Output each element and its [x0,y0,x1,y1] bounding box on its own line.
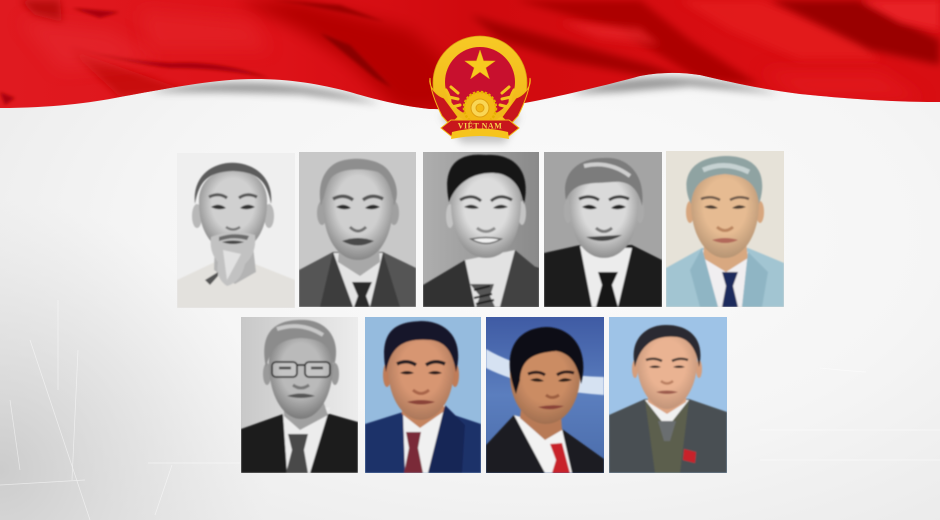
head [564,158,644,258]
head [192,163,274,286]
head [263,320,339,419]
emblem ribbons [430,78,530,125]
head [383,321,459,420]
emblem cog wheel [464,92,496,124]
flag folds [0,0,940,110]
suit [609,399,727,473]
suit [666,248,784,307]
emblem base scroll: VIỆT NAM [458,122,502,130]
red waving flag banner [0,0,940,112]
head [686,156,764,258]
national emblem [430,36,530,143]
portrait 4: man with swept hair in black suit [544,152,662,307]
flag shadow [150,77,780,104]
head [317,159,399,260]
portrait 8: colour photo, dark suit, red tie [486,317,604,473]
suit [241,414,358,473]
portrait 1: white-bearded man in pale shirt [177,153,295,308]
portrait 9: colour photo, grey suit, sweater [609,317,727,473]
head [510,327,583,424]
emblem gold ring [433,36,527,130]
shirt [177,262,295,308]
emblem rice branches [446,87,514,122]
portrait 7: colour photo, navy suit, blue backdrop [365,317,481,473]
suit [486,415,604,473]
portrait 6: elderly man with glasses [241,317,358,473]
portrait 5: colour photo, light blue suit [666,151,784,307]
emblem star [465,50,495,79]
suit [423,260,539,307]
head [632,325,702,409]
red badge [683,449,696,463]
suit [365,412,481,473]
head [446,155,526,258]
suit [544,245,662,307]
portrait 3: smiling dark-haired man [423,152,539,307]
portrait 2: grey-haired man in dark suit [299,152,416,307]
emblem red disc [445,47,515,117]
suit [299,252,416,307]
